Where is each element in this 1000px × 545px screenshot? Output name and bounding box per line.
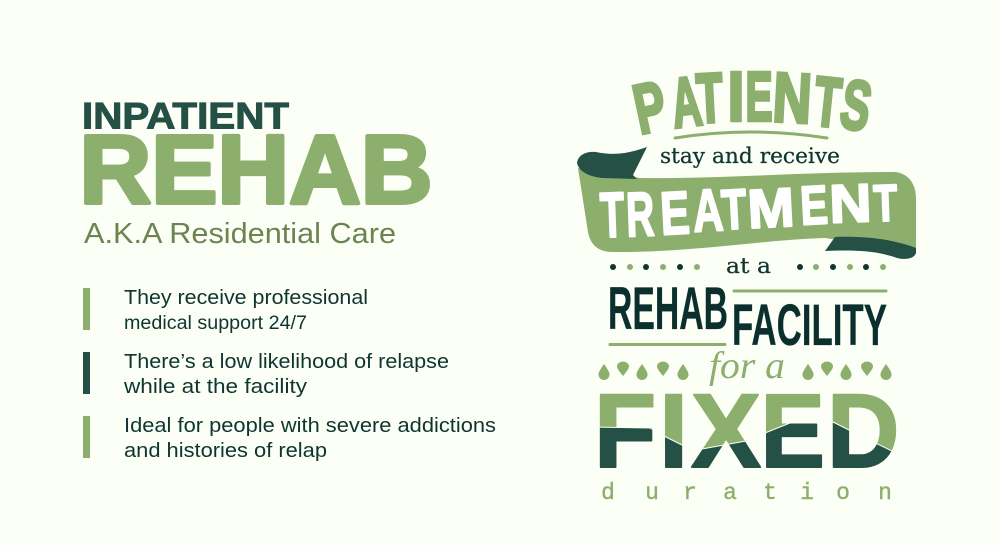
word: patients: P: [627, 65, 673, 149]
word: fixed: F: [594, 372, 656, 489]
word: fixed: [600, 394, 896, 468]
word: rehab: REHAB: [608, 275, 728, 342]
overline: facility: [734, 290, 886, 292]
panel: left heading: [80, 96, 432, 250]
word: duration: duration: [601, 480, 892, 506]
word: treatment: A: [691, 176, 725, 245]
word: fixed: D: [827, 372, 899, 490]
word: treatment: R: [625, 180, 656, 251]
word: fixed: X: [691, 373, 761, 490]
drops: right: [802, 362, 892, 380]
word: patients: E: [745, 58, 773, 136]
word: fixed: I: [659, 373, 688, 490]
word: patients: T: [810, 62, 845, 143]
text: stay and receive: stay and receive: [660, 144, 840, 168]
word: patients: I: [728, 57, 744, 136]
word: fixed: D: [827, 372, 899, 490]
word: treatment: T: [872, 173, 898, 233]
underline: rehab: [610, 343, 725, 346]
text: at a: at a: [726, 254, 771, 278]
bullet 2: while at the facility: [123, 376, 307, 398]
drops: left: [598, 362, 688, 380]
word: treatment: E: [659, 179, 691, 249]
bullet 1: They receive professional: [124, 287, 368, 309]
subheading: A.K.A Residential Care: [84, 218, 396, 250]
bullet 3: Ideal for people with severe addictions: [124, 415, 496, 437]
panel: typographic lockup: [577, 57, 916, 506]
infographic canvas: [83, 70, 916, 500]
word: fixed: F: [594, 372, 656, 489]
bullet 2: [83, 351, 449, 398]
word: patients: N: [771, 59, 813, 139]
word: treatment: E: [799, 175, 829, 237]
word: fixed: I: [659, 373, 688, 490]
heading: inpatient: INPATIENT: [82, 96, 289, 136]
ribbon: [577, 147, 916, 259]
word: patients: [627, 57, 877, 149]
curved underline: [675, 132, 827, 138]
bullet 3: and histories of relap: [124, 440, 327, 462]
dots: left: [610, 264, 700, 270]
heading: rehab: REHAB: [80, 115, 432, 224]
word: treatment: [599, 172, 898, 252]
bullet 1: medical support 24/7: [124, 313, 307, 334]
word: treatment: T: [720, 177, 748, 242]
word: fixed: E: [760, 373, 825, 490]
bullet 3: [83, 415, 496, 462]
panel: bullet list: [83, 287, 496, 462]
bullet 1: [83, 287, 368, 334]
script: for a: for a: [709, 345, 785, 387]
word: facility: FACILITY: [732, 293, 887, 358]
word: patients: A: [667, 62, 705, 144]
word: patients: S: [835, 65, 877, 147]
word: treatment: N: [828, 172, 872, 234]
word: fixed: X: [691, 373, 761, 490]
word: treatment: M: [746, 176, 796, 240]
word: fixed: E: [760, 373, 825, 490]
dots: right: [797, 264, 886, 270]
bullet 2: There’s a low likelihood of relapse: [124, 351, 449, 373]
word: patients: T: [694, 59, 725, 138]
word: treatment: T: [599, 180, 626, 252]
